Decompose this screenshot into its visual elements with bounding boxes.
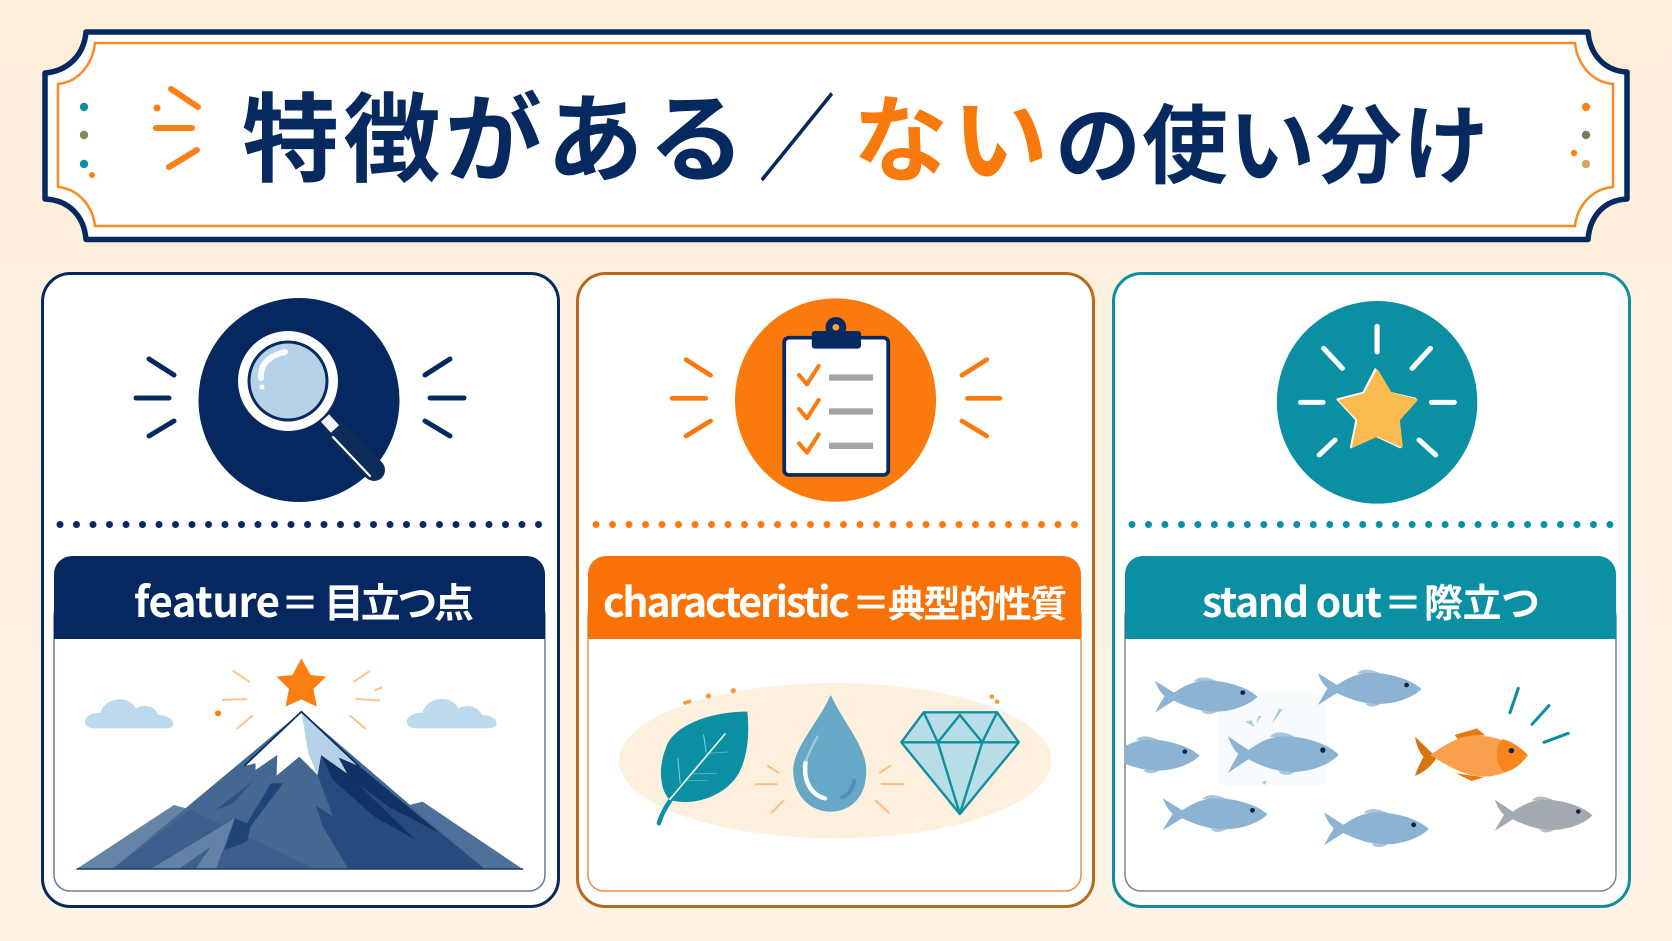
header bar: characteristic	[588, 556, 1081, 639]
orange fish	[1415, 728, 1528, 781]
star rays	[223, 671, 381, 728]
leaf	[659, 712, 748, 823]
header bar: stand out: stand out	[1202, 569, 1382, 629]
title text: の使い分け	[1055, 76, 1489, 201]
illustration: mountain with star	[76, 658, 523, 869]
panel: characteristic	[578, 274, 1094, 906]
header bar: feature: feature	[134, 569, 280, 630]
header bar: characteristic: 典型的性質	[888, 574, 1067, 628]
dotted divider	[596, 521, 1075, 528]
diamond	[901, 712, 1019, 814]
dotted divider	[1132, 521, 1610, 528]
body frame	[588, 600, 1081, 891]
header bar: characteristic: characteristic	[603, 569, 850, 629]
body frame	[1125, 600, 1616, 891]
mountain	[76, 712, 523, 869]
dotted divider	[60, 521, 539, 528]
title text: 特徴がある	[242, 61, 745, 202]
icon: clipboard	[672, 298, 1000, 502]
illustration: school of fish with one orange fish	[1097, 670, 1592, 847]
header bar: stand out	[1125, 556, 1616, 639]
icon: left title sparkle rays	[154, 89, 198, 167]
clouds	[85, 699, 497, 728]
water drop	[793, 695, 866, 812]
illustration: leaf, water drop, diamond	[619, 683, 1051, 838]
panel: feature	[42, 274, 558, 906]
right banner dots	[1571, 103, 1590, 168]
header bar: feature: ＝	[281, 573, 319, 628]
title banner	[45, 32, 1627, 240]
grey fish	[1495, 797, 1592, 832]
attention rays	[1510, 688, 1568, 742]
header bar: feature	[54, 556, 545, 639]
title text: ない	[853, 65, 1048, 202]
header bar: characteristic: ＝	[852, 573, 890, 628]
sparkles	[756, 766, 903, 813]
header bar: feature: 目立つ点	[324, 571, 474, 629]
body frame	[54, 600, 545, 891]
blue fish	[1097, 670, 1429, 847]
header bar: stand out: ＝	[1384, 573, 1422, 628]
star	[277, 658, 326, 707]
title slash: ／	[758, 63, 836, 202]
left banner dots	[80, 103, 95, 178]
icon: magnifying glass	[136, 298, 464, 502]
header bar: stand out: 際立つ	[1424, 573, 1540, 629]
panel: stand out	[1097, 274, 1630, 906]
icon: star badge	[1277, 301, 1477, 504]
